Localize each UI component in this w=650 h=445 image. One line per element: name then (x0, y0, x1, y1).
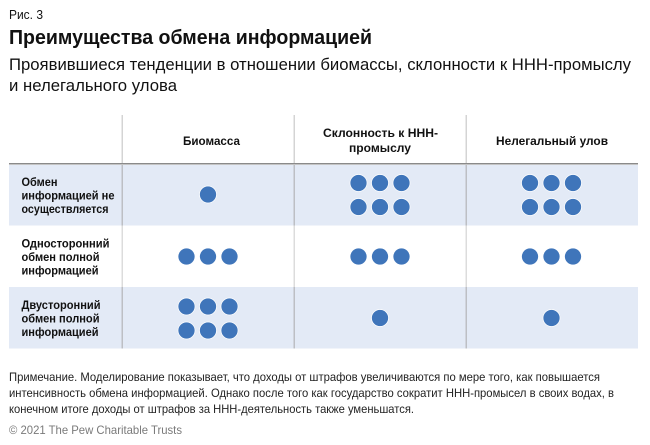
column dividers (122, 115, 467, 163)
row label: two-way exchange (22, 298, 100, 339)
row label: two-way exchange: информацией (22, 325, 98, 339)
column heading: IUU propensity: Склонность к ННН- (323, 126, 438, 140)
dots: row 2 illegal catch (522, 248, 582, 265)
row band: two-way exchange (9, 287, 638, 348)
row label: no exchange (22, 175, 115, 216)
dots: row 1 IUU propensity (350, 174, 410, 216)
note (9, 370, 614, 416)
row label: no exchange: Обмен (22, 175, 58, 189)
dots: row 2 biomass (178, 248, 238, 265)
subtitle (9, 55, 631, 95)
column heading: illegal catch: Нелегальный улов (496, 134, 608, 148)
row label: one-way exchange: Односторонний (22, 236, 110, 250)
header rule (9, 163, 638, 164)
figure label: Рис. 3 (9, 8, 43, 22)
subtitle: Проявившиеся тенденции в отношении биомассы, склонности к ННН-промыслу (9, 55, 631, 74)
row label: one-way exchange: обмен полной (22, 250, 100, 264)
row label: no exchange: осуществляется (22, 202, 108, 216)
dots: row 3 biomass (178, 298, 238, 339)
row band: no information exchange (9, 165, 638, 226)
column heading: IUU propensity: промыслу (349, 141, 411, 155)
dots: row 1 illegal catch (522, 174, 582, 216)
row label: no exchange: информацией не (22, 188, 115, 202)
dots: row 2 IUU propensity (350, 248, 410, 265)
row label: two-way exchange: обмен полной (22, 312, 100, 326)
note: интенсивность обмена информацией. Однако после того как государство сократит ННН-промысел в своих водах, в (9, 386, 614, 400)
row label: two-way exchange: Двусторонний (22, 298, 100, 312)
subtitle: и нелегального улова (9, 76, 178, 95)
row label: one-way exchange: информацией (22, 264, 98, 278)
title: Преимущества обмена информацией (9, 27, 372, 49)
copyright: © 2021 The Pew Charitable Trusts (9, 423, 182, 437)
dots: row 3 IUU propensity (372, 310, 388, 326)
row label: one-way exchange (22, 236, 110, 278)
note: конечном итоге доходы от штрафов за ННН-деятельность также уменьшатся. (9, 402, 414, 416)
note: Примечание. Моделирование показывает, что доходы от штрафов увеличиваются по мере того, как повышается (9, 370, 600, 384)
dots: row 3 illegal catch (543, 310, 560, 326)
table (9, 115, 638, 348)
column heading: IUU propensity (323, 126, 438, 155)
column heading: biomass: Биомасса (183, 134, 240, 148)
column dividers in body (122, 165, 467, 348)
dots: row 1 biomass (200, 186, 216, 203)
